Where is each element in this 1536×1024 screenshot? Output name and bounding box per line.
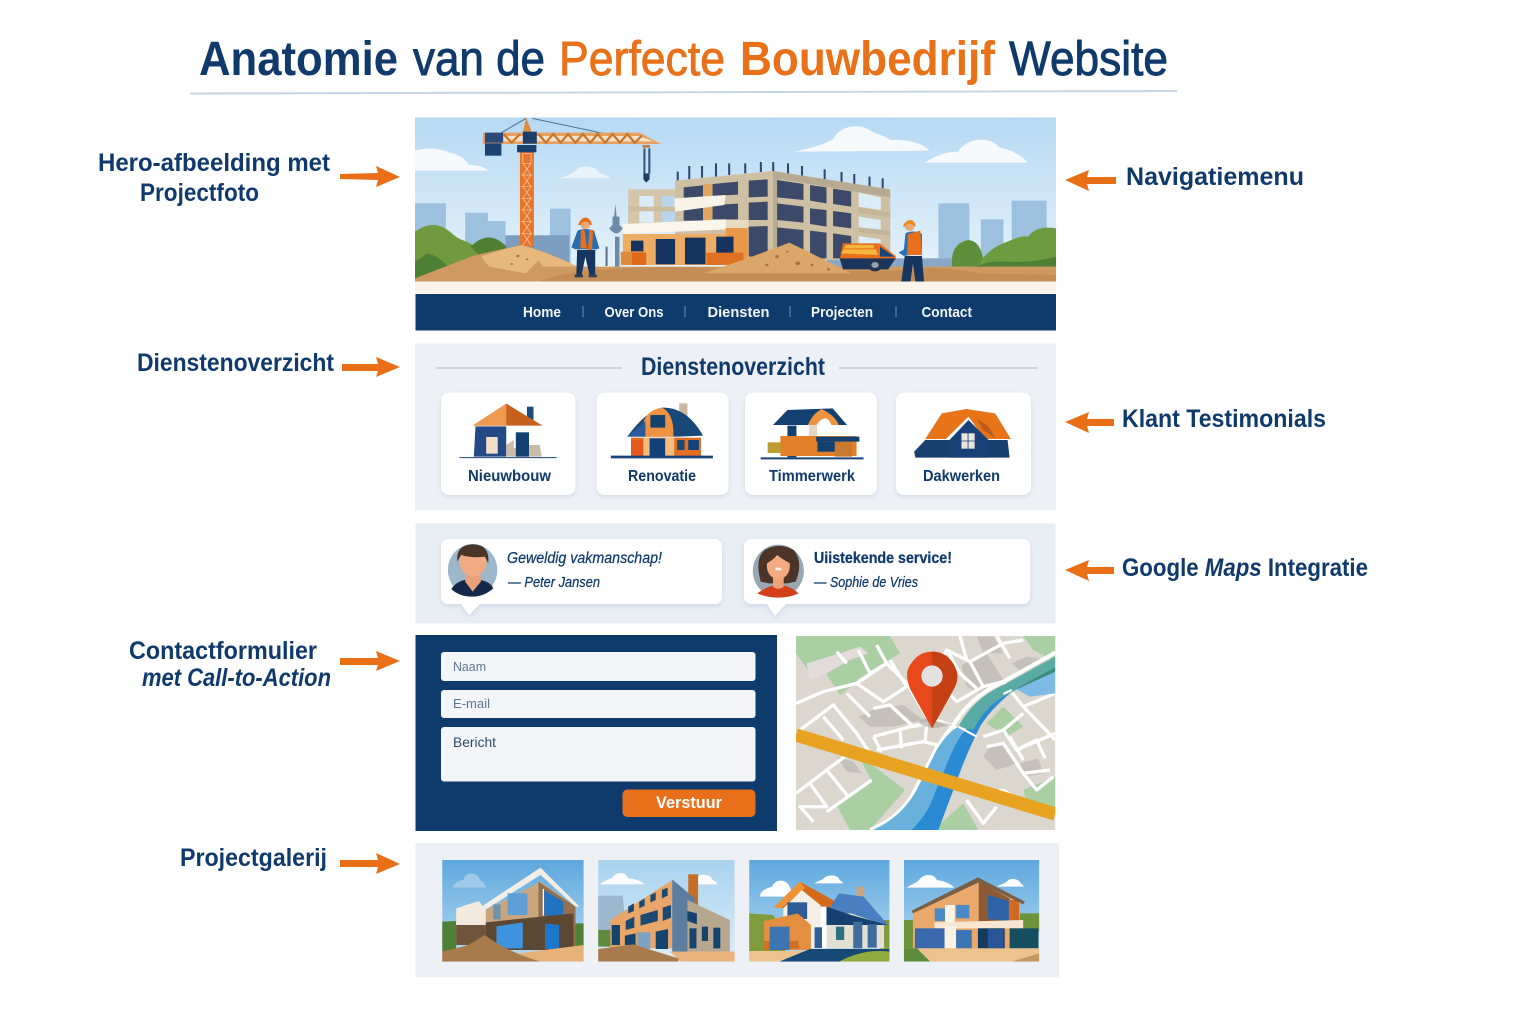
card: Nieuwbouw [441,392,576,495]
arrow: testimonials [1065,412,1114,433]
panel: project gallery [416,843,1059,977]
title [190,33,1177,94]
testimonial: Sophie de Vries: Uiistekende service! [814,550,952,567]
field: Naam [441,652,756,681]
arrow: services [342,357,400,377]
arrow: gallery [340,853,400,874]
building [621,162,890,265]
testimonial: Peter Jansen: — Peter Jansen [507,574,600,591]
photo 2 [598,860,735,962]
panel: services overview [415,344,1056,510]
trees [415,225,478,266]
label: Navigatiemenu: Navigatiemenu [1126,163,1304,191]
title: Website [1009,33,1168,86]
button: Verstuur [622,790,756,817]
label: Hero-afbeelding met Projectfoto: Projectfoto [140,179,259,207]
arrow: hero [340,166,400,187]
title: Perfecte [559,33,725,86]
button: Verstuur: Verstuur [656,793,722,812]
arrow: maps [1065,560,1114,581]
testimonial: Peter Jansen [441,539,722,615]
arrow: navigation [1065,170,1116,191]
panel: navigation bar: Diensten [708,304,770,321]
label: Contactformulier met Call-to-Action: met Call-to-Action [142,664,331,692]
testimonial: Sophie de Vries: — Sophie de Vries [813,574,918,591]
panel: navigation bar: Contact [922,304,972,321]
card: Dakwerken: Dakwerken [923,468,1000,485]
title: Bouwbedrijf [740,33,996,86]
arrow: contact [340,651,400,671]
excavator vehicle [840,243,896,271]
panel: navigation bar: Projecten [811,304,873,321]
card: Timmerwerk: Timmerwerk [769,468,855,485]
field: E-mail [441,690,756,718]
label: Dienstenoverzicht: Dienstenoverzicht [137,349,335,377]
label: Hero-afbeelding met Projectfoto [98,149,331,207]
spire [609,203,623,267]
label: Klant Testimonials: Klant Testimonials [1122,405,1326,433]
label: Projectgalerij: Projectgalerij [180,844,327,872]
card: Nieuwbouw: Nieuwbouw [468,468,552,485]
card: Renovatie [596,392,728,495]
panel: navigation bar: Home [523,304,561,321]
worker 1 [571,217,608,277]
panel: navigation bar [416,294,1056,330]
card: Renovatie: Renovatie [628,468,696,485]
icon: map pin [907,652,957,728]
photo 3 [749,860,889,962]
label: Google Maps Integratie: Google Maps Integratie [1122,554,1368,582]
title: van de [413,33,545,86]
panel: map [796,636,1055,830]
label: Contactformulier met Call-to-Action [129,637,331,692]
card: Timmerwerk [745,392,877,495]
field: Naam: Naam [453,659,486,674]
photo 4 [904,860,1039,962]
card: Dakwerken [896,392,1031,495]
panel: testimonials [416,524,1056,624]
panel: contact form [416,635,777,831]
worker 2 [899,220,924,282]
title: Anatomie [199,33,398,86]
panel: hero image [415,117,1056,294]
testimonial: Peter Jansen: Geweldig vakmanschap! [507,550,663,567]
photo 1 [442,860,584,962]
label: Contactformulier met Call-to-Action: Contactformulier [129,637,317,665]
field: Bericht: Bericht [453,734,496,750]
ground [415,245,1056,282]
field: Bericht [441,727,756,782]
heading: Dienstenoverzicht: Dienstenoverzicht [641,353,826,381]
crane [483,117,661,247]
panel: navigation bar: Over Ons [604,304,664,321]
label: Hero-afbeelding met Projectfoto: Hero-afbeelding met [98,149,331,177]
testimonial: Sophie de Vries [744,539,1030,616]
field: E-mail: E-mail [453,696,490,711]
